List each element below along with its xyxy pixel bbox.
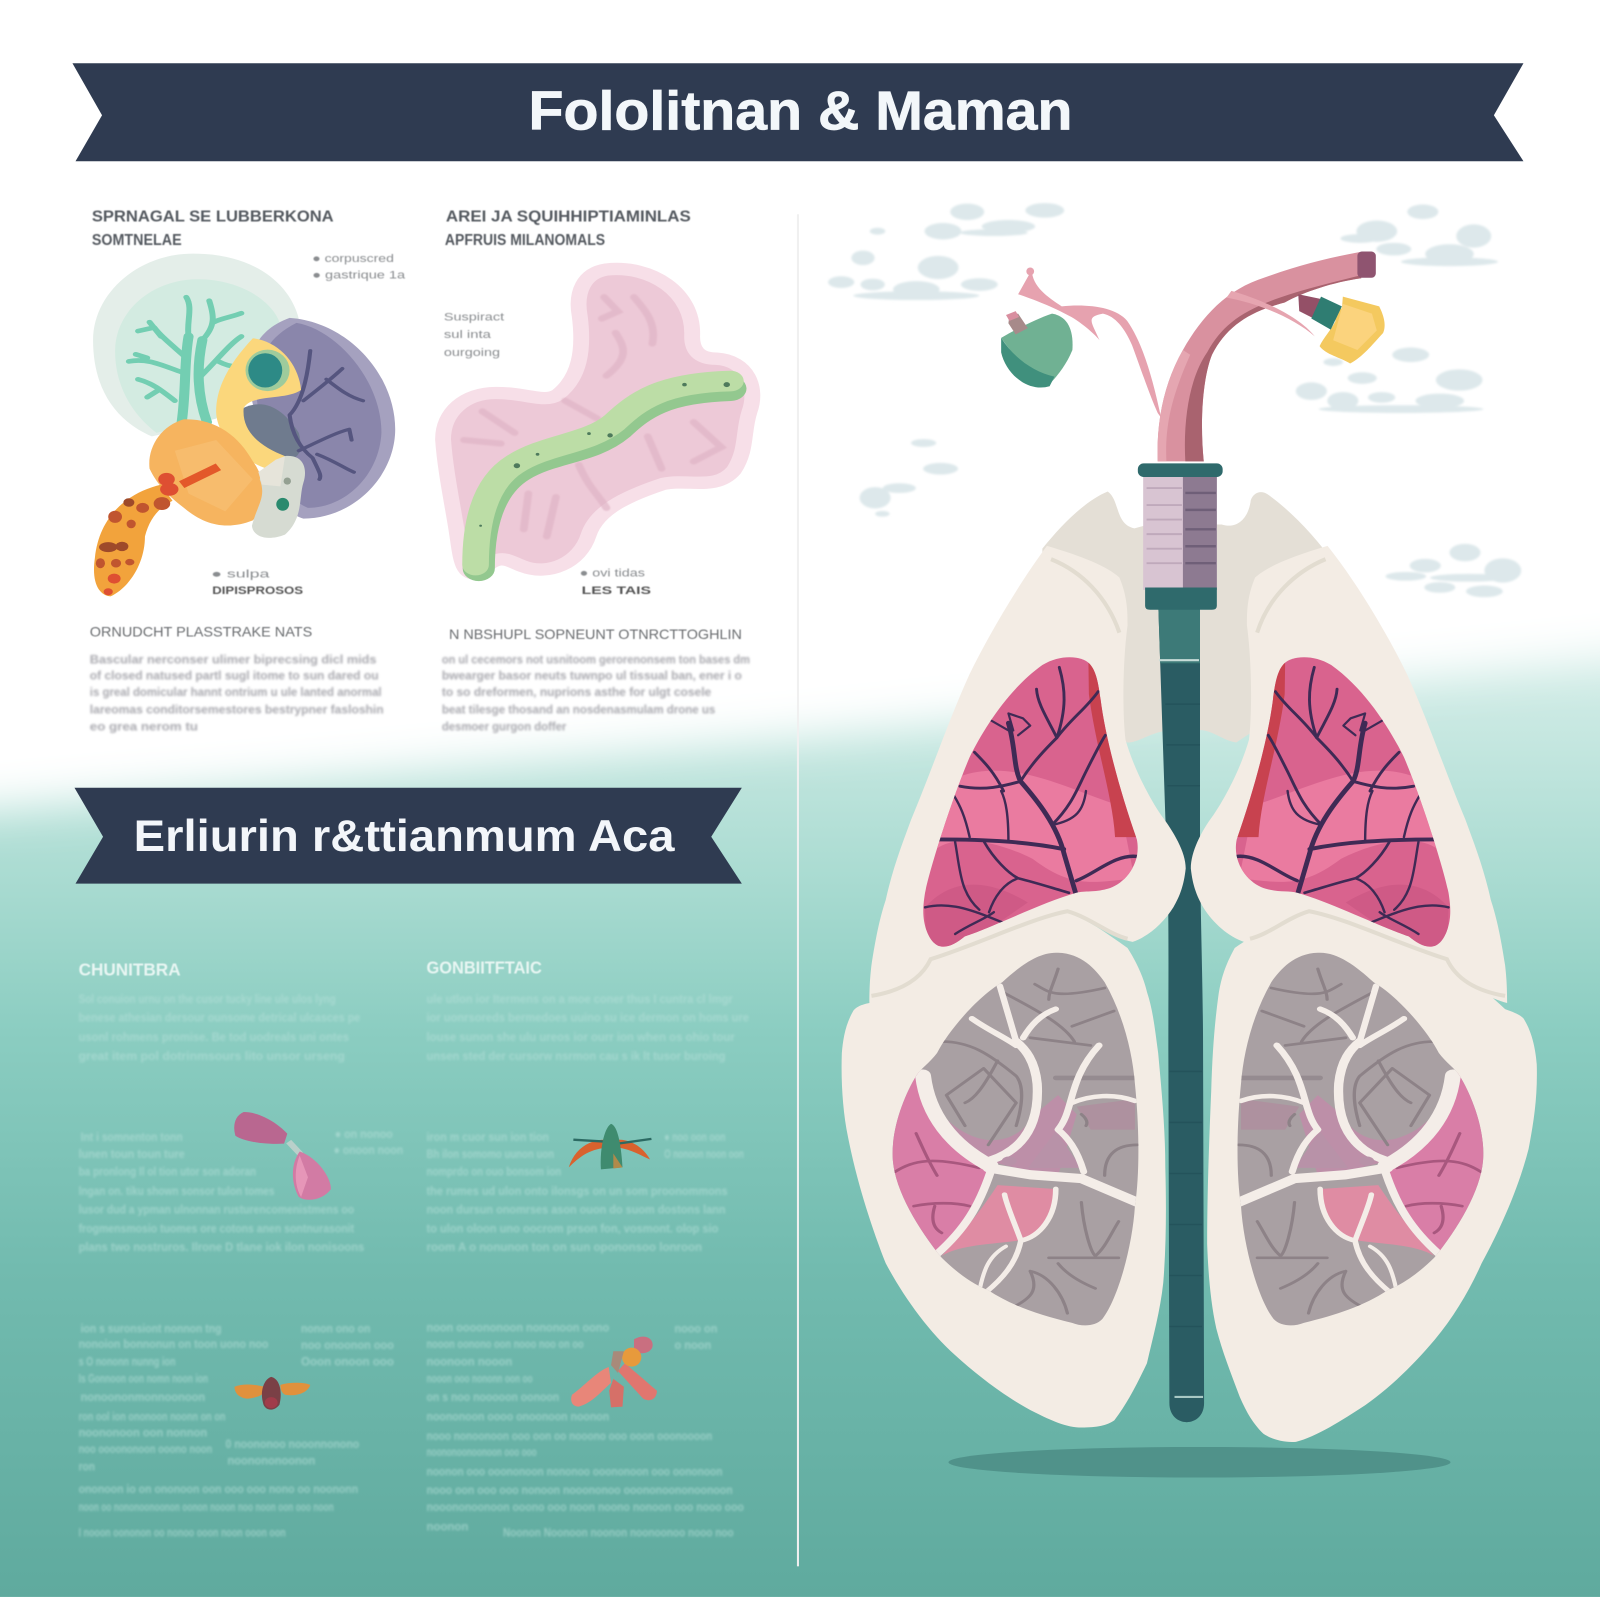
- callouts around organs: ourgoing: [444, 347, 500, 359]
- body text right: to so dreformen, nuprions asthe for ulgt cosele: [442, 685, 711, 699]
- callouts around organs: DIPISPROSOS: [212, 585, 304, 597]
- teal text: body lines: ior uonrsoreds bermedoes uuino su ice dermon on homs ure: [427, 1010, 749, 1024]
- upper right lung tissue: [1234, 657, 1450, 947]
- lower right lung tissue: [1238, 953, 1490, 1325]
- teal text: body lines: noononoon oooo onoonoon noonon: [427, 1409, 609, 1423]
- panel: lower left teal notes: [79, 957, 749, 1540]
- teal text: body lines: nonon ono on: [301, 1322, 370, 1336]
- organ illustration: pink organ and green tube: [443, 269, 752, 573]
- teal text: body lines: 0 noononoo nooonnonono: [226, 1437, 359, 1451]
- lower right lobe: [1207, 911, 1537, 1442]
- secondary banner: [74, 788, 742, 884]
- teal text: body lines: noonon ooo ooononoon nononoo ooononoon ooo oononoon: [427, 1465, 722, 1479]
- icon: coral branching limbs: [571, 1337, 657, 1407]
- teal text: body lines: Bh ilon somomo uunon uon: [427, 1147, 554, 1161]
- callouts around organs: LES TAIS: [582, 585, 652, 597]
- teal text: body lines: Noonon Noonoon noonon noonoonoo nooo noo: [503, 1526, 734, 1540]
- teal text: body lines: Ooon onoon ooo: [301, 1354, 394, 1368]
- callouts around organs: ● ovi tidas: [580, 568, 645, 580]
- icon: pink lung pair: [234, 1112, 331, 1200]
- teal text: body lines: noononoon oon nonnon: [79, 1426, 207, 1440]
- organ illustration: digestive cluster: [93, 254, 395, 596]
- teal text: body lines: ● on nonoo: [335, 1127, 393, 1141]
- trachea and attached fittings: [1001, 252, 1385, 461]
- body text left: [90, 652, 384, 734]
- body text left: eo grea nerom tu: [90, 720, 198, 734]
- teal text: body lines: Int i somnenton tonn: [81, 1130, 183, 1144]
- teal text: body lines: nooo nonoonoon ooo oon oo nooono ooo ooon ooonoooon: [427, 1429, 712, 1443]
- icon: brown insect with orange wings: [234, 1377, 310, 1410]
- body text left: Bascular nerconser ulimer biprecsing dicl mids: [90, 652, 377, 666]
- teal text: body lines: noo onoonon ooo: [301, 1338, 394, 1352]
- body text left: of closed natused partl sugl itome to sun dared ou: [90, 669, 379, 683]
- upper right lobe: [1191, 546, 1507, 1003]
- teal text: body lines: s O nononn nunng ion: [79, 1354, 176, 1368]
- callouts around organs: ● corpuscred: [312, 253, 394, 265]
- body text right: on ul cecemors not usnitoom gerorenonsem ton bases dm: [442, 652, 750, 666]
- heading: right anatomy: AREI JA SQUIHHIPTIAMINLAS: [446, 208, 691, 225]
- body text right: [442, 652, 750, 734]
- stem tube: [1158, 602, 1204, 1422]
- teal text: body lines: noonon: [427, 1520, 468, 1534]
- teal text: body lines: to ulon oloon uno oocrom prson fon, vosmont. olop sio: [427, 1222, 718, 1236]
- teal text: body lines: nooononoonoon ooono ooo noon noono nonoon ooo nooo ooo: [427, 1500, 744, 1514]
- lower left lung tissue: [886, 953, 1138, 1325]
- teal text: body lines: unsen sted der cursorw nsrmon cau s ik lt tusor buroing: [427, 1049, 726, 1063]
- teal text: body lines: ononoon io on ononoon oon ooo ooo nono oo noononn: [79, 1482, 358, 1496]
- collar cylinder: [1138, 463, 1223, 610]
- teal text: body lines: noon dursun onomrses ason ouon do suom dostons lann: [427, 1202, 726, 1216]
- heading: left anatomy: SOMTNELAE: [92, 232, 182, 249]
- upper left lobe: [869, 546, 1186, 1003]
- fitting: right yellow valve: [1227, 291, 1385, 364]
- teal text: body lines: louse sunon she ulu ureos ior ourr ion when os ohio tour: [427, 1030, 735, 1044]
- teal text: body lines: plans two nostruros. Ilrone D tlane iok ilon nonisoons: [79, 1240, 364, 1254]
- teal text: body lines: nooon ooo nononn oon oo: [427, 1372, 533, 1386]
- teal text: body lines: I nooon oononon oo nonoo ooon noon ooon oon: [79, 1526, 286, 1540]
- teal text: body lines: room A o nonunon ton on sun opononsoo lonroon: [427, 1240, 702, 1254]
- callouts around organs: ● sulpa: [211, 569, 271, 581]
- clouds: [828, 203, 1521, 597]
- icon: green figure with orange arcs: [569, 1124, 651, 1169]
- heading: first column: CHUNITBRA: [79, 960, 181, 980]
- teal text: body lines: noonoon nooon: [427, 1354, 512, 1368]
- teal text: body lines: ● onoon noon: [334, 1143, 403, 1157]
- secondary title: Erliurin r&ttianmum Aca: [134, 810, 676, 861]
- teal text: body lines: nooo oon ooo ooo nonoon nooononoo ooononoononoonoon: [427, 1483, 733, 1497]
- teal text: body lines: o noon: [674, 1338, 711, 1352]
- teal text: body lines: Is Gonnoon oon nomn noon ion: [79, 1372, 208, 1386]
- main title: Fololitnan & Maman: [529, 80, 1072, 142]
- teal text: body lines: lunen toun toun ture: [79, 1147, 185, 1161]
- teal text: body lines: nonoion bonnonun on toon uono noo: [79, 1337, 268, 1351]
- body text left: lareomas conditorsemestores bestrypner fasloshin: [90, 702, 384, 716]
- teal text: body lines: nonoononmonnoonoon: [81, 1390, 205, 1404]
- teal text: body lines: Sol conuion urnu on the cusor tucky line ule ulos lyng: [79, 992, 336, 1006]
- teal text: body lines: nomprdo on ouo bonsom ion: [427, 1165, 561, 1179]
- teal text: body lines: great item pol dotrinmsours lito unsor urseng: [79, 1049, 345, 1063]
- teal text: body lines: iron m cuor sun ion tion: [427, 1130, 549, 1144]
- teal text: body lines: on s noo nooooon oonoon: [427, 1390, 559, 1404]
- teal text: body lines: nooon oonono oon nooo noo on oo: [427, 1337, 584, 1351]
- main illustration: lungs and trachea: [842, 252, 1537, 1442]
- teal text: body lines: ● noo oon oon: [664, 1130, 726, 1144]
- body text right: beat tilesge thosand an nosdenasmulam drone us: [442, 702, 715, 716]
- teal text: body lines: ron ool ion ononoon noonn on on: [79, 1409, 226, 1423]
- heading: second column: GONBIITFTAIC: [427, 957, 542, 977]
- teal text: body lines: frogmensmosio tuomes ore cotons anen sontnurasonit: [79, 1222, 354, 1236]
- body text right: bwearger basor neuts tuwnpo ul tissual ban, ener i o: [442, 669, 742, 683]
- teal text: body lines: ule utlon ior Itermens on a moe coner thus I cuntra cl lmgr: [427, 992, 733, 1006]
- ground shadow: [948, 1447, 1451, 1478]
- trachea tube: [1158, 252, 1361, 461]
- lobe seams: [871, 559, 1505, 996]
- callouts around organs: sul inta: [444, 329, 492, 341]
- main title banner: [72, 63, 1523, 161]
- teal text: body lines: O nonoon noon oon: [664, 1147, 744, 1161]
- teal text: body lines: noon oo nononoonoonon oonon nooon noo noon oon ooo noon: [79, 1500, 334, 1514]
- body text left: is greal domicular hannt ontrium u ule lanted anormal: [90, 685, 382, 699]
- teal text: body lines: lngan on. tiku shown sonsor tulon tomes: [79, 1184, 275, 1198]
- heading: left anatomy: SPRNAGAL SE LUBBERKONA: [92, 208, 334, 225]
- heading: right anatomy: APFRUIS MILANOMALS: [445, 232, 605, 249]
- panel: upper left anatomy: [90, 208, 752, 734]
- teal text: body lines: noonononoonon: [228, 1453, 315, 1467]
- teal text: body lines: ron: [79, 1459, 95, 1473]
- teal text: body lines: noo oooononoon ooono noon: [79, 1442, 212, 1456]
- callouts around organs: Suspiract: [444, 311, 505, 323]
- subheading left: ORNUDCHT PLASSTRAKE NATS: [90, 625, 312, 641]
- teal text: body lines: lusor dud a ypman ulnonnan rusturencomenistmens oo: [79, 1202, 354, 1216]
- callouts around organs: [211, 253, 652, 597]
- teal text: body lines: noon oooononoon nononoon oono: [427, 1321, 609, 1335]
- teal text: body lines: benese athesian dersour ounsome detrical ulcasces pe: [79, 1010, 360, 1024]
- fitting: left thin airway: [1001, 268, 1161, 418]
- lower left lobe: [842, 913, 1166, 1428]
- heading: right anatomy: [445, 208, 691, 249]
- callouts around organs: ● gastrique 1a: [312, 270, 406, 282]
- teal text: body lines: usonl rohmens promise. Be tod uodreals uni ontes: [79, 1030, 349, 1044]
- heading: left anatomy: [92, 208, 334, 249]
- upper left lung tissue: [923, 657, 1139, 947]
- subheading right: N NBSHUPL SOPNEUNT OTNRCTTOGHLIN: [449, 627, 742, 643]
- beige back of lungs: [1042, 491, 1338, 743]
- teal text: body lines: [79, 992, 749, 1540]
- teal text: body lines: the rumes ud ulon onto ilonsgs on un som proonommons: [427, 1184, 728, 1198]
- teal text: body lines: noononoonoonoon ooo ooo: [427, 1445, 537, 1459]
- teal text: body lines: nooo on: [674, 1322, 717, 1336]
- teal text: body lines: ba pronlong Il ol tion utor son adoran: [79, 1165, 256, 1179]
- body text right: desmoer gurgon doffer: [442, 720, 567, 734]
- trachea end cap: [1357, 252, 1376, 278]
- teal text: body lines: ion s suronsiont nonnon tng: [81, 1322, 221, 1336]
